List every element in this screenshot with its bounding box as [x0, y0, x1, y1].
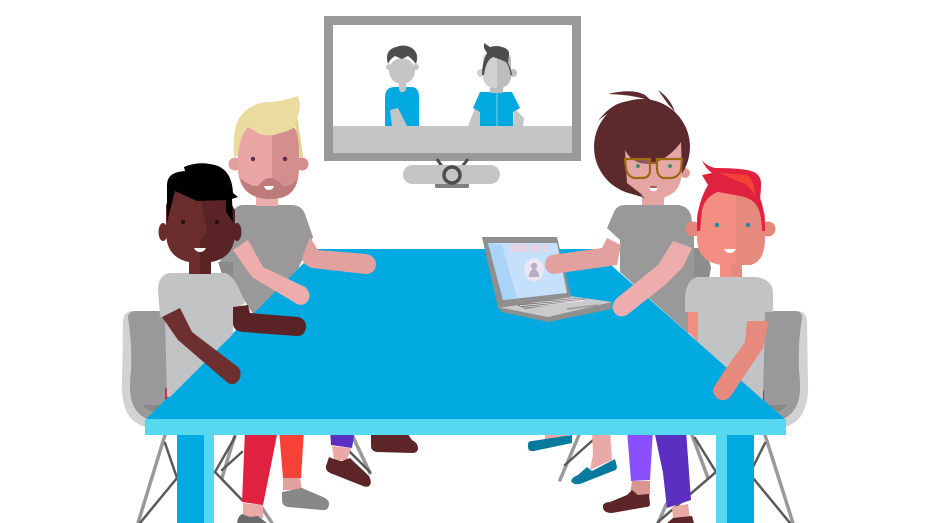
- back chair: [688, 248, 711, 325]
- red trousers: [242, 430, 278, 505]
- brown shoes: [326, 457, 371, 487]
- beard: [240, 178, 298, 199]
- arm pointing at laptop: [545, 238, 621, 274]
- blue violet trousers: [330, 430, 355, 448]
- front arm: [713, 321, 769, 400]
- teal shoes and bare legs: [545, 430, 568, 441]
- hair: [594, 99, 690, 195]
- right chair: [560, 311, 808, 523]
- face: [625, 142, 682, 200]
- right table leg: [716, 435, 754, 523]
- person: woman with glasses: [594, 90, 711, 333]
- left table leg: [177, 435, 214, 523]
- user avatar on screen: [524, 258, 544, 282]
- meeting table: [145, 249, 786, 523]
- arm on table: [302, 237, 376, 274]
- arm toward table edge: [613, 241, 692, 316]
- person: blond man: [218, 96, 376, 314]
- black hair: [167, 163, 238, 222]
- person: man in front left: [158, 163, 306, 397]
- laptop: [482, 237, 612, 322]
- red hair: [697, 160, 765, 231]
- legs and shoes under the table: [165, 388, 764, 523]
- hair strands: [598, 90, 675, 121]
- conference camera: [403, 159, 500, 188]
- front arm: [233, 240, 310, 305]
- left chair: [122, 311, 370, 523]
- blond hair: [234, 96, 300, 157]
- wall monitor: [324, 16, 581, 161]
- app toolbar icons: [510, 244, 547, 252]
- gray shoes: [237, 514, 267, 523]
- purple trousers: [627, 430, 653, 481]
- glasses: [625, 159, 682, 178]
- trouser glimpses beside the table: [165, 388, 175, 400]
- remote participant right: [468, 43, 524, 126]
- remote participant left: [385, 46, 419, 126]
- woman's arms: [545, 238, 692, 316]
- arm on table: [233, 305, 306, 336]
- person: red haired man: [685, 160, 776, 400]
- front arm: [162, 308, 241, 384]
